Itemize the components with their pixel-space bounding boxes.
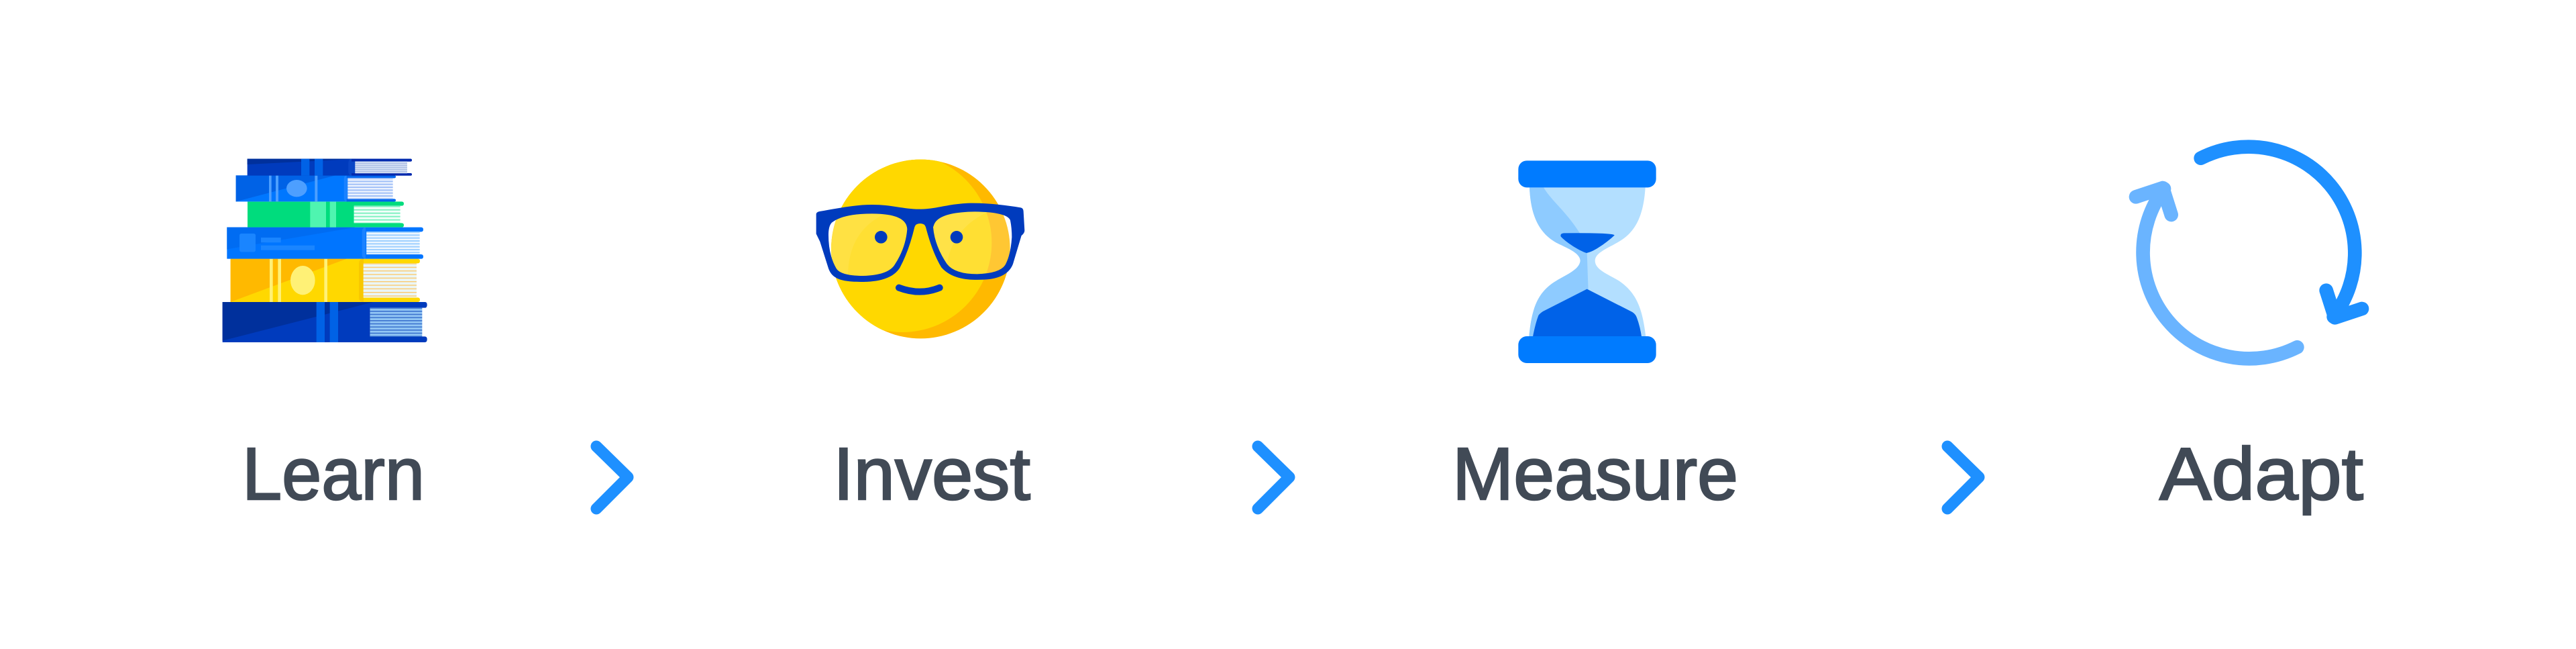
light arrow: [2136, 188, 2297, 358]
label: Measure: Measure: [1452, 433, 1738, 515]
book: green: [248, 201, 404, 228]
icon: hourglass: [1518, 160, 1656, 363]
arrow: chevron 1: [596, 446, 628, 509]
arrow: chevron 3: [1947, 446, 1979, 509]
icon: stack of books: [223, 159, 427, 342]
sand: top: [1560, 233, 1615, 253]
book: dark blue bottom: [223, 302, 427, 342]
glasses frame: [816, 203, 1024, 282]
book: bright blue: [236, 175, 396, 201]
eyes: [875, 231, 963, 244]
book: yellow: [231, 259, 420, 302]
top cap: [1518, 160, 1656, 187]
sand: bottom: [1533, 289, 1642, 338]
book: navy top: [248, 159, 412, 176]
book: blue with title plate: [227, 228, 423, 259]
label: Adapt: Adapt: [2159, 433, 2363, 515]
glass shade: [1527, 187, 1589, 338]
arrow: chevron 2: [1258, 446, 1289, 509]
glass: [1529, 187, 1646, 336]
face: [831, 160, 1010, 338]
smile: [899, 288, 940, 292]
lens tint: [828, 211, 1012, 276]
label: Invest: Invest: [833, 433, 1030, 515]
dark arrow: [2201, 147, 2362, 317]
icon: smiling face with glasses: [813, 153, 1024, 338]
bottom cap: [1518, 336, 1656, 363]
icon: cycle arrows: [2136, 147, 2362, 358]
label: Learn: Learn: [242, 433, 425, 515]
